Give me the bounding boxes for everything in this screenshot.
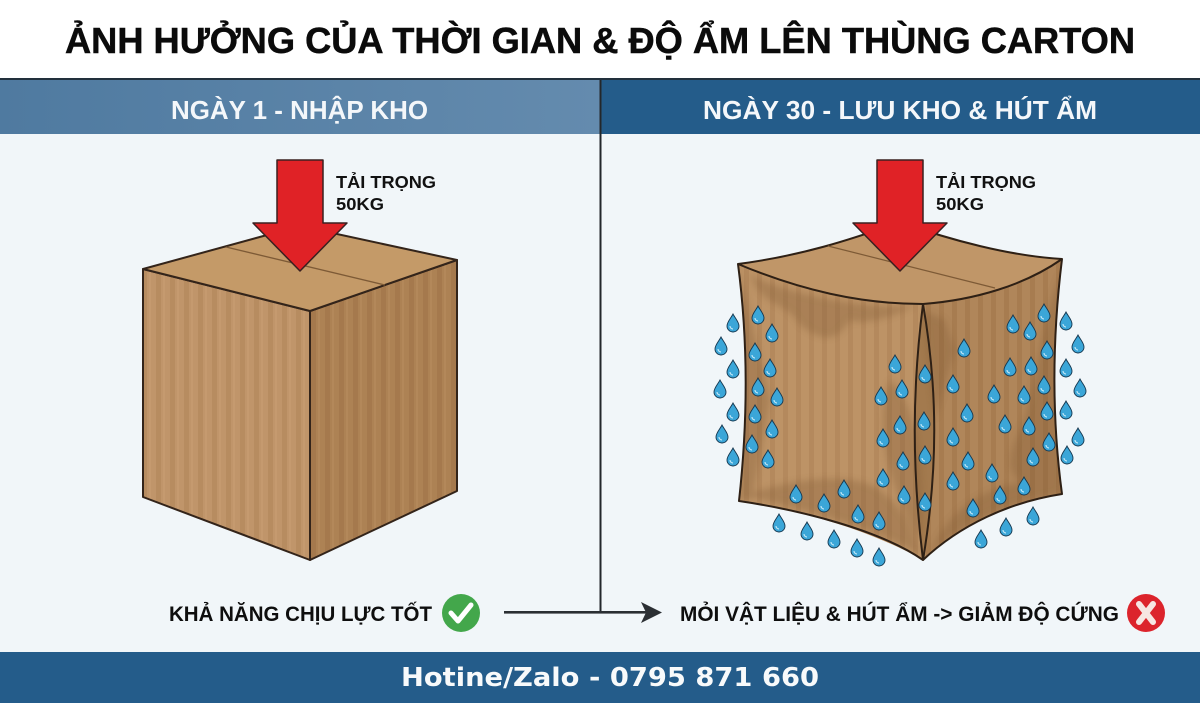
load label: day 30: TẢI TRỌNG xyxy=(936,171,1036,192)
seam panel xyxy=(915,304,934,560)
footer hotline bar: Hotine/Zalo - 0795 871 660 xyxy=(401,663,819,693)
center divider xyxy=(600,80,602,612)
load arrow: day 30 xyxy=(853,160,947,271)
load label: day 1: TẢI TRỌNG xyxy=(336,171,436,192)
load label: day 1 xyxy=(336,171,436,214)
load label: day 1: 50KG xyxy=(336,194,384,214)
panel header: day 1 xyxy=(0,80,600,134)
footer hotline bar xyxy=(0,652,1200,703)
status text: bad: MỎI VẬT LIỆU & HÚT ẨM -> GIẢM ĐỘ CỨNG xyxy=(680,602,1119,626)
transition arrow xyxy=(504,602,662,623)
load arrow: day 1 xyxy=(253,160,347,271)
load label: day 30 xyxy=(936,171,1036,214)
title band xyxy=(0,0,1200,80)
icon: green check xyxy=(442,594,480,632)
load label: day 30: 50KG xyxy=(936,194,984,214)
panel header: day 30 xyxy=(600,80,1200,134)
box outlines xyxy=(738,222,1062,560)
moisture stains xyxy=(738,264,1062,555)
status text: good: KHẢ NĂNG CHỊU LỰC TỐT xyxy=(169,602,432,626)
icon: red cross xyxy=(1127,594,1165,632)
panel header: day 1: NGÀY 1 - NHẬP KHO xyxy=(171,95,428,125)
panel header: day 30: NGÀY 30 - LƯU KHO & HÚT ẨM xyxy=(703,95,1097,125)
deformed wet carton box xyxy=(738,222,1062,560)
intact carton box xyxy=(143,226,457,560)
water droplets xyxy=(714,304,1086,566)
title: ẢNH HƯỞNG CỦA THỜI GIAN & ĐỘ ẨM LÊN THÙNG CARTON xyxy=(65,19,1135,61)
